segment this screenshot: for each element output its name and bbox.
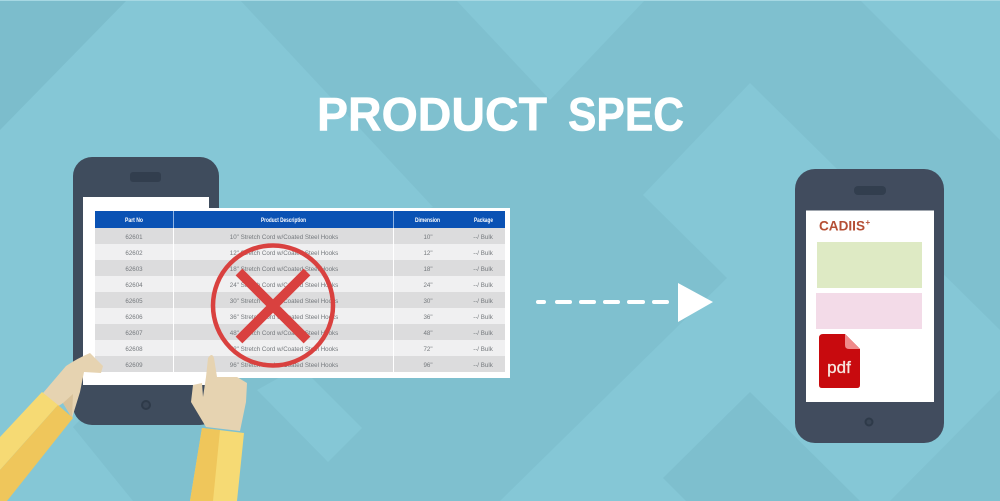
table rows: 62608 [125, 346, 143, 353]
table header: Package [474, 217, 493, 224]
table header: Dimension [415, 217, 440, 224]
table rows: 24" Stretch Cord w/Coated Steel Hooks [230, 282, 338, 289]
right hand pointing at table [190, 355, 247, 501]
table rows: 72" [423, 346, 433, 353]
table rows: --/ Bulk [473, 346, 494, 353]
icon: red cross prohibition mark [213, 246, 333, 366]
table rows: --/ Bulk [473, 234, 494, 241]
right phone [795, 169, 944, 443]
green block [817, 242, 922, 288]
icon: pdf file [819, 334, 860, 388]
table rows: 30" Stretch Cord w/Coated Steel Hooks [230, 298, 338, 305]
title [317, 88, 684, 140]
table rows: 36" Stretch Cord w/Coated Steel Hooks [230, 314, 338, 321]
table header: Part No [125, 217, 143, 224]
table rows: 62609 [125, 362, 143, 369]
table rows: 72" Stretch Cord w/Coated Steel Hooks [230, 346, 338, 353]
table rows: 62602 [125, 250, 143, 257]
table rows: 48" [423, 330, 433, 337]
table rows: 12" [423, 250, 433, 257]
table rows: 36" [423, 314, 433, 321]
dashed arrow [538, 283, 713, 322]
title: PRODUCT [317, 88, 547, 140]
title: SPEC [568, 88, 684, 140]
table rows: 62603 [125, 266, 143, 273]
left phone [73, 157, 219, 425]
table rows: --/ Bulk [473, 298, 494, 305]
table header [95, 211, 505, 228]
table rows: 96" [423, 362, 433, 369]
table rows: 48" Stretch Cord w/Coated Steel Hooks [230, 330, 338, 337]
table rows: 62601 [125, 234, 143, 241]
CADIIS logo: CADIIS [819, 218, 865, 234]
table rows: 62606 [125, 314, 143, 321]
table rows: 18" Stretch Cord w/Coated Steel Hooks [230, 266, 338, 273]
table rows: --/ Bulk [473, 314, 494, 321]
table rows: --/ Bulk [473, 250, 494, 257]
product spec table [95, 208, 510, 378]
table rows [95, 228, 505, 372]
table rows: 62605 [125, 298, 143, 305]
table rows: 12" Stretch Cord w/Coated Steel Hooks [230, 250, 338, 257]
table rows: --/ Bulk [473, 330, 494, 337]
pink block [816, 293, 922, 329]
CADIIS logo: + [866, 218, 870, 227]
table rows: 62604 [125, 282, 143, 289]
table header: Product Description [261, 217, 306, 224]
icon: pdf file: pdf [827, 358, 851, 377]
table rows: 24" [423, 282, 433, 289]
table rows: 10" [423, 234, 433, 241]
table rows: 18" [423, 266, 433, 273]
table rows: 30" [423, 298, 433, 305]
table rows: --/ Bulk [473, 362, 494, 369]
table rows: 96" Stretch Cord w/Coated Steel Hooks [230, 362, 338, 369]
table rows: 10" Stretch Cord w/Coated Steel Hooks [230, 234, 338, 241]
table rows: 62607 [125, 330, 143, 337]
table rows: --/ Bulk [473, 282, 494, 289]
table rows: --/ Bulk [473, 266, 494, 273]
left hand holding phone [0, 353, 103, 501]
